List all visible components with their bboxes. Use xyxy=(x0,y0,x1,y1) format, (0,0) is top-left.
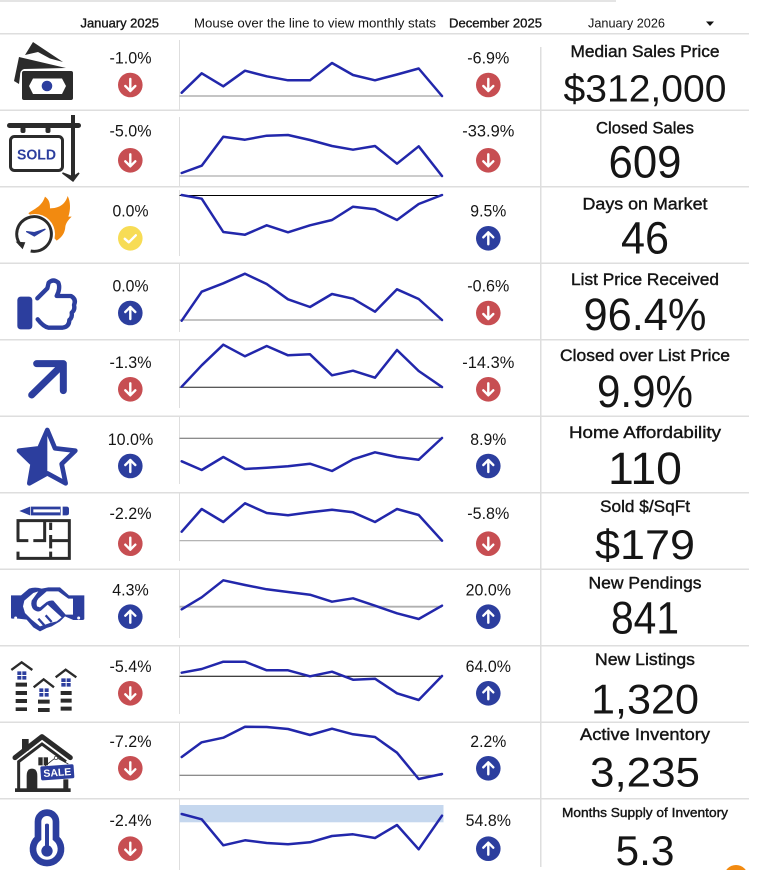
row: list price received: 0.0% xyxy=(112,278,149,296)
row: sold price per square foot: $179 xyxy=(595,521,695,568)
icon: handshake xyxy=(11,587,84,631)
row: list price received xyxy=(17,271,719,340)
icon: floor plan with pencil xyxy=(17,507,69,559)
row: list price received: -0.6% xyxy=(467,278,510,296)
row: days on market: 9.5% xyxy=(470,202,507,220)
icon: money xyxy=(14,42,73,100)
header row: January 2025 xyxy=(80,16,159,30)
row: new pendings: 841 xyxy=(611,592,679,643)
row: list price received: List Price Received xyxy=(571,271,719,289)
row: months supply of inventory: 54.8% xyxy=(466,812,511,830)
row: closed over list price: -1.3% xyxy=(110,354,152,372)
row: closed over list price: Closed over List Price xyxy=(560,347,730,365)
row: home affordability: 110 xyxy=(608,443,682,494)
row: closed sales: -33.9% xyxy=(462,122,515,140)
row: median sales price: -1.0% xyxy=(110,50,152,68)
row: active inventory: Active Inventory xyxy=(580,726,711,744)
icon: thermometer xyxy=(33,813,61,863)
row: new pendings: 4.3% xyxy=(112,582,149,600)
sparkline xyxy=(180,727,442,779)
row: closed sales xyxy=(7,115,694,188)
icon: sold sign: SOLD xyxy=(17,148,56,164)
row: sold price per square foot: Sold $/SqFt xyxy=(600,498,690,516)
sparkline xyxy=(180,195,442,235)
sparkline xyxy=(180,438,442,471)
row: list price received: 96.4% xyxy=(584,289,706,340)
row: median sales price: Median Sales Price xyxy=(570,43,720,61)
row: new listings: 1,320 xyxy=(591,675,699,722)
sparkline xyxy=(180,580,442,619)
row: new listings: New Listings xyxy=(595,651,695,669)
sparkline xyxy=(180,135,442,176)
row: home affordability: 8.9% xyxy=(470,431,507,449)
icon: sold sign xyxy=(7,115,81,181)
icon: half star xyxy=(19,430,75,483)
row: days on market: 0.0% xyxy=(112,202,149,220)
row: median sales price xyxy=(14,42,726,110)
sparkline xyxy=(180,63,442,96)
header row: December 2025 xyxy=(449,16,542,30)
sparkline xyxy=(180,503,442,541)
row: median sales price: $312,000 xyxy=(564,68,726,110)
row: home affordability: 10.0% xyxy=(108,431,154,449)
icon: house for sale: SALE xyxy=(43,767,72,780)
row: days on market xyxy=(15,195,708,263)
row: median sales price: -6.9% xyxy=(467,50,510,68)
sparkline xyxy=(180,274,442,321)
row: closed sales: 609 xyxy=(608,136,682,188)
row: active inventory: 2.2% xyxy=(470,733,507,751)
header row: Mouse over the line to view monthly stats xyxy=(194,16,436,30)
row: new pendings: New Pendings xyxy=(588,574,702,592)
row: closed sales: -5.0% xyxy=(110,122,152,140)
header row xyxy=(80,16,714,30)
row: days on market: Days on Market xyxy=(582,195,708,213)
row: sold price per square foot: -5.8% xyxy=(467,505,510,523)
row: new listings xyxy=(11,651,699,722)
icon: clock with flame xyxy=(15,196,72,254)
icon: house for sale xyxy=(15,737,74,792)
row: sold price per square foot: -2.2% xyxy=(110,505,152,523)
row: active inventory: -7.2% xyxy=(110,733,152,751)
sparkline xyxy=(180,662,442,700)
row: active inventory xyxy=(15,726,711,796)
row: new pendings xyxy=(11,574,702,643)
row: closed over list price: -14.3% xyxy=(462,354,515,372)
row: new listings: -5.4% xyxy=(110,658,152,676)
row: home affordability xyxy=(19,424,722,494)
row: months supply of inventory: -2.4% xyxy=(110,812,152,830)
sparkline with band xyxy=(180,805,444,849)
row: closed over list price xyxy=(32,345,730,417)
row: new listings: 64.0% xyxy=(466,658,511,676)
row: new pendings: 20.0% xyxy=(466,582,511,600)
row: home affordability: Home Affordability xyxy=(569,424,722,442)
orange help button xyxy=(724,865,748,870)
sparkline xyxy=(180,345,442,387)
icon: thumbs up xyxy=(17,280,75,329)
row: closed over list price: 9.9% xyxy=(597,366,693,417)
header row: January 2026 xyxy=(588,16,665,30)
icon: houses xyxy=(11,662,76,712)
row: active inventory: 3,235 xyxy=(590,749,700,796)
row: closed sales: Closed Sales xyxy=(596,119,694,137)
icon: arrow up right xyxy=(32,364,63,395)
row: days on market: 46 xyxy=(621,212,669,263)
row: months supply of inventory: Months Supply of Inventory xyxy=(562,805,729,820)
row: sold price per square foot xyxy=(17,498,695,568)
row: months supply of inventory xyxy=(33,805,729,870)
